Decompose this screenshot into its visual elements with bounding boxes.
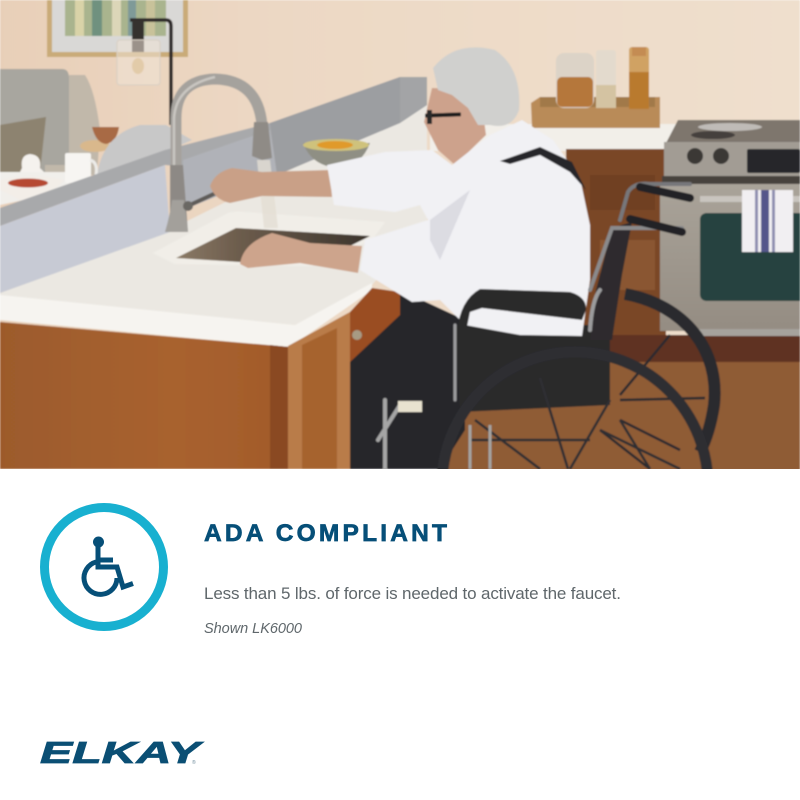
icon: wheelchair symbol	[84, 536, 133, 594]
man: forearm with upper hand	[210, 168, 332, 203]
man: forearm with lower hand	[240, 233, 362, 273]
heading: ADA COMPLIANT	[204, 520, 447, 547]
wheelchair frame and handles	[378, 184, 690, 469]
bowl on side table	[80, 127, 119, 152]
floor	[440, 335, 800, 470]
dining table with plate	[0, 153, 96, 205]
wood cabinet	[0, 288, 400, 469]
logo: Elkay: ELKAY	[40, 735, 205, 770]
logo: Elkay	[40, 735, 205, 770]
body text: Less than 5 lbs. of force is needed to activate the faucet.	[204, 584, 621, 603]
badge ring	[44, 508, 164, 626]
wall background	[0, 0, 800, 345]
sink basin	[176, 228, 370, 262]
panel: kitchen photo	[0, 0, 800, 469]
logo: Elkay: ®	[192, 759, 196, 766]
tray and jars	[531, 47, 660, 128]
countertop	[0, 100, 427, 325]
warning sticker	[398, 401, 422, 412]
sink rim	[153, 212, 385, 266]
countertop front edge	[0, 283, 372, 347]
man: white shirt	[327, 120, 590, 336]
man: head	[424, 47, 519, 165]
dining chair	[97, 125, 192, 175]
partition face	[0, 165, 170, 293]
right wall counter	[430, 124, 680, 151]
sofa and pillow	[0, 69, 100, 175]
caption: Shown LK6000	[204, 621, 302, 637]
wheelchair seat and back	[455, 222, 632, 412]
partition cap	[0, 122, 274, 226]
icon: accessibility badge	[44, 508, 164, 626]
rear wheel	[600, 294, 715, 469]
water stream	[257, 160, 278, 228]
suspender strap	[500, 147, 586, 190]
shirt shadow	[430, 190, 470, 260]
wheelchair armrest	[457, 289, 586, 332]
faucet	[165, 77, 272, 232]
floor lamp	[117, 20, 171, 125]
stove and oven	[660, 120, 800, 336]
man: legs	[350, 290, 465, 469]
salad bowl	[303, 139, 370, 168]
dish towel	[742, 190, 793, 252]
framed picture	[47, 0, 188, 57]
front wheel	[442, 352, 708, 618]
base cabinet back	[566, 149, 666, 354]
